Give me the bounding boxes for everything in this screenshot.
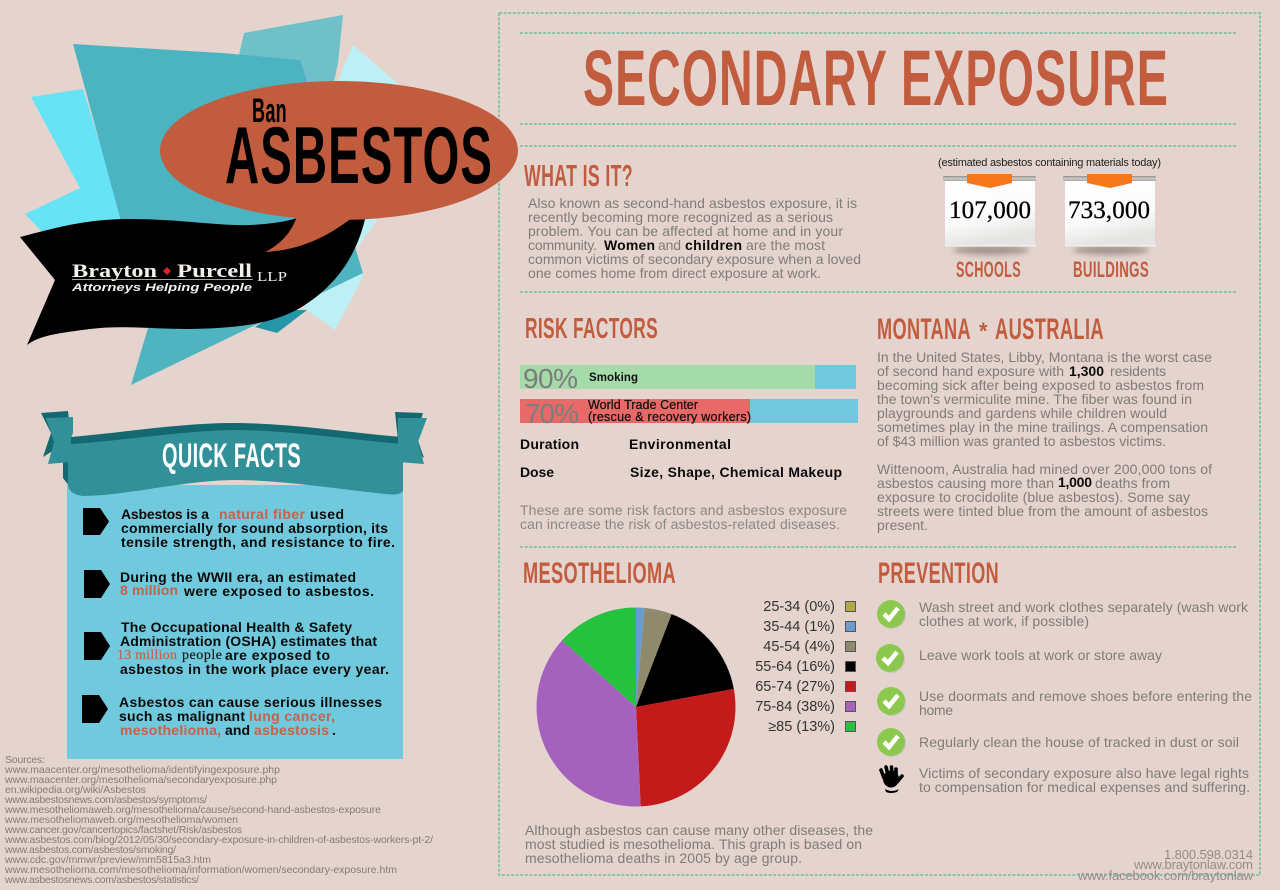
text block: sources: www.cancer.gov/cancertopics/factshet/Risk/asbestos — [4, 824, 242, 836]
logo: Ban Asbestos badge — [20, 15, 518, 385]
fact 4: lung cancer, — [249, 708, 335, 724]
fact 4: mesothelioma, — [120, 722, 221, 738]
title: SECONDARY — [583, 33, 888, 122]
contact details — [1077, 847, 1254, 883]
paragraph: children — [685, 237, 742, 253]
fact 3: people — [182, 648, 222, 663]
item: wash clothes: clothes at work, if possible) — [919, 613, 1089, 629]
fact 1: used — [310, 506, 344, 522]
item: legal rights with hand icon: Victims of secondary exposure also have legal rights — [919, 765, 1249, 781]
chart note: most studied is mesothelioma. This graph is based on — [525, 836, 862, 852]
other risk factors: Dose — [520, 464, 554, 480]
law firm name: Purcell — [177, 261, 252, 282]
paragraph: and — [658, 237, 681, 253]
law firm name: Brayton — [72, 261, 158, 282]
text block: sources: www.mesotheliomaweb.org/mesothelioma/women — [4, 814, 238, 826]
fact 4: such as malignant — [119, 708, 245, 724]
legend: ≥85 (13%) — [768, 719, 835, 735]
heading: MESOTHELIOMA — [523, 557, 676, 590]
heading: * — [979, 318, 988, 345]
panel: mesothelioma — [523, 557, 873, 866]
fact 1: commercially for sound absorption, its — [121, 520, 388, 536]
australia paragraph: deaths from — [1095, 475, 1170, 491]
law firm name: Attorneys Helping People — [71, 282, 252, 294]
text block: sources: www.mesothelioma.com/mesothelioma/information/women/secondary-exposure.htm — [4, 864, 397, 876]
text block: sources: www.asbestos.com/blog/2012/05/30/secondary-exposure-in-children-of-asbestos-workers-pt-2/ — [4, 834, 433, 846]
card: buildings — [1063, 174, 1156, 282]
contact details: 1.800.598.0314 — [1164, 847, 1253, 862]
legend: 65-74 (27%) — [755, 679, 835, 695]
panel: asbestos containing materials — [938, 157, 1161, 282]
text block: sources: www.asbestosnews.com/asbestos/statistics/ — [4, 874, 199, 886]
chart note: mesothelioma deaths in 2005 by age group. — [525, 850, 802, 866]
panel: prevention — [876, 557, 1252, 795]
text block: sources: Sources: — [5, 754, 45, 766]
paragraph: Also known as second-hand asbestos exposure, it is — [528, 195, 857, 211]
australia paragraph: 1,000 — [1058, 474, 1092, 490]
item: legal rights with hand icon — [881, 765, 1250, 795]
law firm name: LLP — [257, 270, 287, 285]
fact 2: 8 million — [120, 582, 178, 598]
logo headline: ASBESTOS — [225, 111, 493, 201]
heading — [877, 313, 1104, 346]
fact 1: natural fiber — [219, 506, 306, 522]
pie chart — [537, 608, 735, 807]
panel: montana and australia — [877, 313, 1212, 533]
montana paragraph: residents — [1110, 363, 1166, 379]
text block: sources: www.asbestos.com/asbestos/smoking/ — [4, 844, 176, 856]
item: work tools: Leave work tools at work or store away — [919, 647, 1162, 663]
paragraph: community. — [528, 237, 597, 253]
item: doormats — [877, 687, 1252, 718]
paragraph: problem. You can be affected at home and in your — [528, 223, 843, 239]
fact 3: The Occupational Health & Safety — [121, 619, 352, 635]
chart note: Although asbestos can cause many other diseases, the — [525, 822, 873, 838]
note — [520, 502, 847, 532]
bar: smoking 90%: Smoking — [589, 372, 638, 384]
paragraph: one comes home from direct exposure at work. — [528, 265, 821, 281]
caption: (estimated asbestos containing materials today) — [938, 157, 1161, 169]
bar: smoking 90% — [520, 363, 856, 394]
text block: sources: www.asbestosnews.com/asbestos/symptoms/ — [4, 794, 207, 806]
legend: 45-54 (4%) — [763, 639, 835, 655]
heading: MONTANA — [877, 313, 971, 346]
legend: 25-34 (0%) — [763, 599, 835, 615]
card: buildings: BUILDINGS — [1073, 257, 1149, 282]
text block: sources: www.maacenter.org/mesothelioma/secondaryexposure.php — [4, 774, 277, 786]
speech bubble — [160, 81, 518, 252]
australia paragraph: exposure to crocidolite (blue asbestos). Some say — [877, 489, 1190, 505]
fact 1 — [83, 506, 395, 550]
fact 3: are exposed to — [225, 647, 330, 663]
contact details: www.braytonlaw.com — [1133, 857, 1253, 872]
fact 3: asbestos in the work place every year. — [120, 661, 389, 677]
law firm name — [71, 261, 287, 294]
bar: world trade center 70%: (rescue & recovery workers) — [588, 410, 751, 424]
fact 4 — [82, 694, 382, 738]
australia paragraph: present. — [877, 517, 928, 533]
montana paragraph: In the United States, Libby, Montana is the worst case — [877, 349, 1212, 365]
text block: sources: www.cdc.gov/mmwr/preview/mm5815a3.htm — [4, 854, 211, 866]
logo headline — [225, 92, 493, 201]
bar: world trade center 70%: 70% — [525, 398, 579, 429]
note: can increase the risk of asbestos-related diseases. — [520, 516, 840, 532]
other risk factors: Size, Shape, Chemical Makeup — [630, 464, 842, 480]
fact 4: asbestosis — [254, 722, 329, 738]
fact 2: During the WWII era, an estimated — [120, 569, 356, 585]
panel background — [67, 485, 403, 759]
australia paragraph — [877, 461, 1212, 533]
logo background shards — [25, 15, 397, 385]
heading: PREVENTION — [878, 557, 999, 590]
paragraph: are the most — [746, 237, 825, 253]
contact details: www.facebook.com/braytonlaw — [1077, 868, 1254, 883]
text block: sources: www.mesotheliomaweb.org/mesothelioma/cause/second-hand-asbestos-exposure — [4, 804, 381, 816]
text block: sources: www.maacenter.org/mesothelioma/identifyingexposure.php — [4, 764, 280, 776]
item: clean house — [877, 728, 1239, 757]
australia paragraph: streets were tinted blue from the amount of asbestos — [877, 503, 1208, 519]
item: doormats: home — [919, 702, 953, 718]
quick facts heading: QUICK FACTS — [162, 437, 301, 475]
text block: sources — [4, 754, 433, 886]
item: clean house: Regularly clean the house of tracked in dust or soil — [919, 734, 1239, 750]
montana paragraph: 1,300 — [1069, 363, 1104, 379]
montana paragraph: of second hand exposure with — [877, 363, 1064, 379]
ribbon banner — [41, 411, 427, 496]
fact 1: tensile strength, and resistance to fire. — [121, 534, 395, 550]
fact 4: and — [225, 722, 250, 738]
fact 4: Asbestos can cause serious illnesses — [119, 694, 382, 710]
legend — [755, 599, 856, 735]
heading: AUSTRALIA — [995, 313, 1104, 346]
montana paragraph: playgrounds and gardens while children would — [877, 405, 1167, 421]
fact 1: Asbestos is a — [121, 506, 209, 522]
other risk factors: Duration — [520, 436, 579, 452]
australia paragraph: Wittenoom, Australia had mined over 200,000 tons of — [877, 461, 1212, 477]
card: schools: 107,000 — [949, 197, 1031, 224]
card: schools: SCHOOLS — [956, 257, 1021, 282]
bar: world trade center 70% — [520, 398, 858, 429]
note: These are some risk factors and asbestos exposure — [520, 502, 847, 518]
fact 3: 13 million — [117, 648, 177, 663]
logo headline: Ban — [252, 92, 287, 130]
heading: WHAT IS IT? — [524, 158, 633, 193]
item: doormats: Use doormats and remove shoes before entering the — [919, 688, 1252, 704]
paragraph: Women — [604, 237, 655, 253]
montana paragraph: sometimes play in the mine trailings. A compensation — [877, 419, 1208, 435]
legend: 35-44 (1%) — [763, 619, 835, 635]
montana paragraph: becoming sick after being exposed to asbestos from — [877, 377, 1204, 393]
paragraph — [528, 195, 861, 281]
chart note — [525, 822, 873, 866]
fact 4: . — [332, 722, 336, 738]
montana paragraph: of $43 million was granted to asbestos victims. — [877, 433, 1166, 449]
bar: smoking 90%: 90% — [523, 363, 578, 394]
australia paragraph: asbestos causing more than — [877, 475, 1054, 491]
montana paragraph: the town's vermiculite mine. The fiber was found in — [877, 391, 1192, 407]
item: wash clothes — [877, 599, 1249, 629]
legend: 55-64 (16%) — [755, 659, 835, 675]
heading: RISK FACTORS — [525, 313, 658, 345]
panel: what is it — [524, 158, 861, 281]
legend: 75-84 (38%) — [755, 699, 835, 715]
item: wash clothes: Wash street and work clothes separately (wash work — [919, 599, 1249, 615]
montana paragraph — [877, 349, 1212, 449]
black ribbon — [20, 218, 365, 345]
card: schools — [943, 174, 1036, 282]
bar: world trade center 70%: World Trade Center — [588, 398, 698, 412]
paragraph: common victims of secondary exposure when a loved — [528, 251, 861, 267]
text block: sources: en.wikipedia.org/wiki/Asbestos — [5, 784, 146, 796]
fact 3 — [84, 619, 389, 677]
other risk factors — [520, 436, 842, 480]
paragraph: recently becoming more recognized as a serious — [528, 209, 833, 225]
other risk factors: Environmental — [629, 436, 731, 452]
fact 2 — [84, 569, 374, 599]
item: work tools — [876, 644, 1162, 673]
panel: risk factors — [520, 313, 858, 532]
panel: quick facts — [41, 411, 427, 759]
item: legal rights with hand icon: to compensation for medical expenses and suffering. — [919, 779, 1250, 795]
fact 2: were exposed to asbestos. — [183, 583, 374, 599]
fact 3: Administration (OSHA) estimates that — [120, 633, 377, 649]
card: buildings: 733,000 — [1068, 197, 1150, 224]
